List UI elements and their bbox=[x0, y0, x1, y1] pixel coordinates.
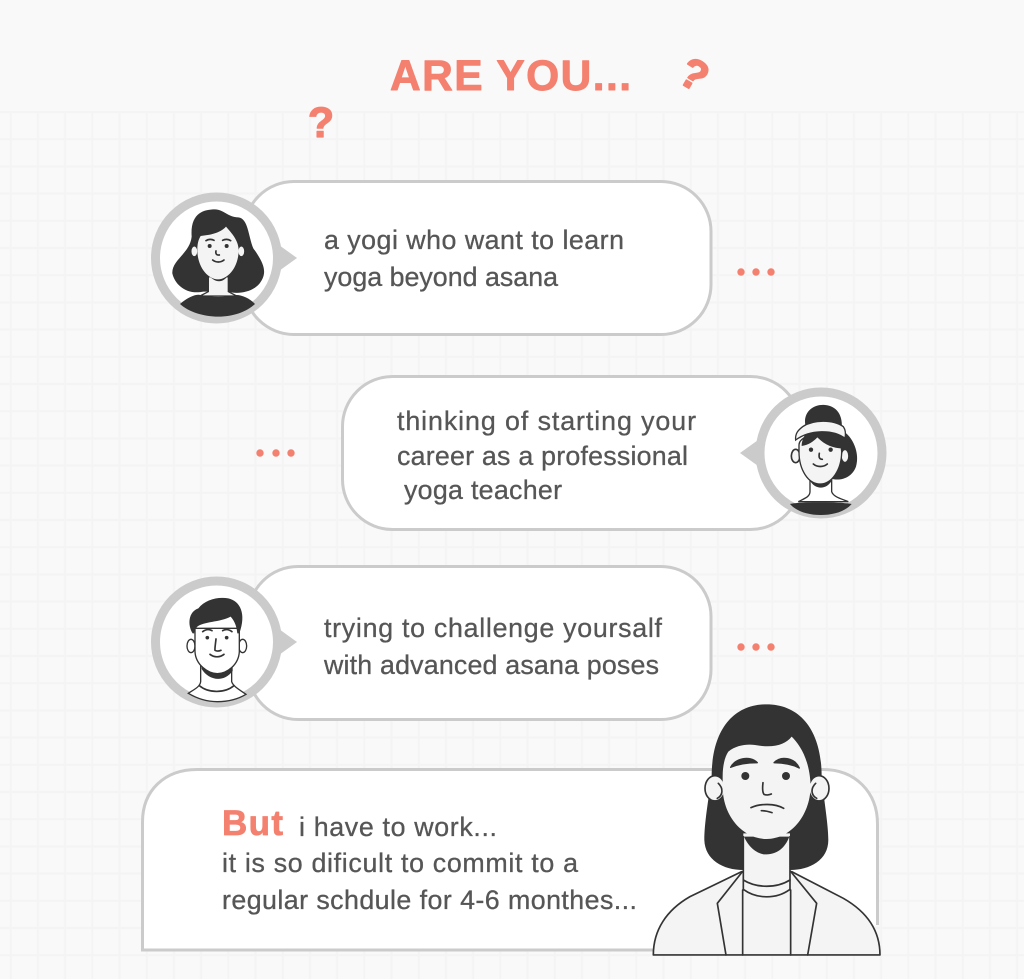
bubble 3 text: with advanced asana poses bbox=[323, 650, 659, 680]
bubble 1 text: yoga beyond asana bbox=[324, 262, 558, 292]
avatar: man bbox=[156, 581, 278, 703]
bubble 2 text: thinking of starting your bbox=[397, 406, 696, 436]
dots: bubble 1 bbox=[737, 268, 775, 276]
bubble 3 pointer bbox=[272, 624, 297, 660]
bottom bubble text: But bbox=[222, 804, 283, 843]
panel: speech bubble 3 bbox=[156, 566, 711, 720]
bottom bubble text bbox=[222, 804, 637, 915]
illustration: worried person bbox=[653, 704, 880, 955]
icon: question mark left: ? bbox=[308, 99, 334, 147]
avatar: woman with long hair bbox=[156, 197, 278, 319]
title: ARE YOU... bbox=[390, 53, 631, 100]
bubble 3 text bbox=[323, 613, 663, 680]
bubble 3 text: trying to challenge yoursalf bbox=[324, 613, 663, 643]
bottom bubble text: it is so dificult to commit to a bbox=[222, 848, 578, 878]
bubble 2 text bbox=[397, 406, 696, 505]
panel: speech bubble 2 bbox=[342, 376, 882, 530]
bubble 2 body bbox=[342, 376, 800, 530]
dots: bubble 2 bbox=[256, 449, 295, 457]
bottom bubble text: i have to work... bbox=[299, 812, 497, 842]
bubble 3 body bbox=[248, 566, 711, 720]
bubble 1 text bbox=[324, 225, 624, 292]
bubble 2 pointer bbox=[740, 435, 765, 471]
avatar: woman with headband bbox=[760, 392, 882, 515]
icon: question mark right: ? bbox=[671, 48, 717, 101]
bubble 2 text: yoga teacher bbox=[404, 475, 562, 505]
bubble 1 pointer bbox=[272, 240, 297, 276]
dots: bubble 3 bbox=[737, 643, 775, 651]
bottom bubble outline bbox=[142, 770, 878, 950]
bubble 1 text: a yogi who want to learn bbox=[324, 225, 624, 255]
bubble 1 body bbox=[244, 182, 711, 334]
bottom bubble text: regular schdule for 4-6 monthes... bbox=[222, 885, 637, 915]
bubble 2 text: career as a professional bbox=[397, 441, 688, 471]
panel: bottom speech bubble bbox=[142, 704, 880, 955]
panel: speech bubble 1 bbox=[156, 182, 711, 334]
